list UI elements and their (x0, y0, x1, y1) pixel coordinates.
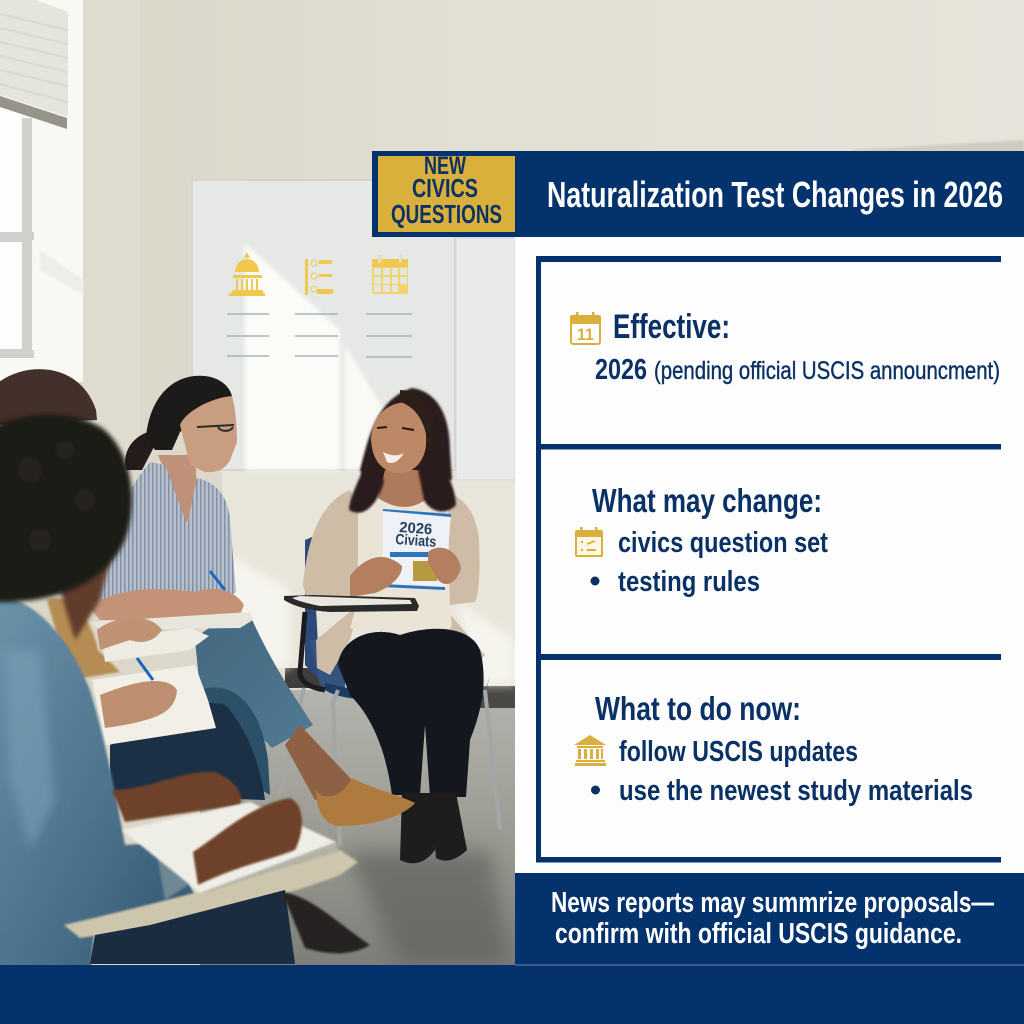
neck (378, 470, 428, 507)
student in striped shirt (85, 376, 415, 826)
cuff (155, 840, 196, 900)
window glass and frame (0, 118, 34, 358)
lower wall (222, 465, 515, 686)
effective date: 2026 (595, 354, 647, 386)
face (180, 396, 237, 472)
inner top (350, 498, 452, 636)
header bar (372, 151, 1024, 237)
lower legs (90, 890, 295, 964)
dark shoe (282, 892, 370, 953)
board text lines (227, 314, 412, 357)
board icon: checklist (305, 259, 333, 295)
heading: Effective: (613, 308, 730, 346)
footer note (515, 873, 1024, 965)
bullet text: follow USCIS updates (619, 736, 858, 768)
hair sides (349, 430, 456, 513)
hand (97, 618, 162, 650)
far forearm (112, 772, 241, 822)
hair (0, 369, 97, 425)
gold badge (378, 152, 515, 232)
board icon: calendar (372, 255, 408, 294)
floor (200, 668, 515, 965)
window (0, 0, 83, 382)
jeans (195, 615, 313, 748)
bullet (591, 786, 600, 794)
writing notebook (92, 665, 216, 745)
booklet (382, 509, 451, 590)
gold badge: CIVICS (412, 173, 478, 203)
pen (137, 658, 153, 680)
shirt (85, 462, 236, 605)
notebook (90, 612, 253, 630)
section: what to do now (574, 690, 973, 807)
content frame (536, 256, 1001, 862)
arm and hand (90, 589, 244, 620)
bottom band (0, 965, 1024, 1024)
window reveal (0, 0, 83, 382)
head hair (146, 376, 232, 450)
board icon: capitol dome (229, 252, 265, 296)
hair front (400, 390, 437, 452)
window blind (0, 0, 68, 117)
writing hand (100, 681, 177, 728)
window column (83, 0, 140, 470)
icon: calendar 11: 11 (577, 325, 594, 344)
small notebook (102, 628, 209, 662)
booklet: Civiats (395, 531, 437, 551)
bullet (590, 576, 600, 586)
hands (350, 548, 461, 597)
bullet text: testing rules (618, 566, 760, 598)
icon: government building (574, 735, 606, 766)
boots (400, 793, 467, 863)
hair back (360, 388, 452, 480)
middle student arms and notebooks (47, 598, 265, 800)
icon: calendar 11 (570, 312, 601, 344)
section: effective (570, 308, 1000, 386)
trousers (338, 629, 484, 797)
gold badge: NEW (424, 152, 466, 180)
neck (158, 455, 197, 525)
floor shadow (345, 850, 510, 965)
teacher with chair (279, 388, 500, 863)
blonde hair (47, 598, 120, 680)
cardigan (303, 490, 485, 675)
bullet text: civics question set (618, 527, 828, 559)
heading: What may change: (592, 482, 822, 519)
chair (279, 537, 500, 845)
booklet: 2026 (399, 519, 433, 538)
curly hair (0, 414, 132, 602)
section: what may change (575, 482, 828, 598)
white content panel (515, 237, 1024, 873)
dark trousers (110, 703, 265, 800)
neck (60, 560, 110, 640)
face (371, 402, 426, 473)
heading: What to do now: (595, 690, 801, 727)
back student (0, 369, 97, 425)
denim shirt (0, 595, 195, 975)
desk arm (284, 595, 419, 612)
front student (0, 414, 370, 975)
glasses (197, 425, 234, 431)
whiteboard (192, 180, 515, 480)
ankle (285, 725, 352, 800)
ponytail (125, 432, 155, 470)
desk (64, 802, 358, 938)
shirt highlight (5, 650, 55, 850)
gold badge: QUESTIONS (391, 199, 502, 229)
near forearm (193, 798, 302, 885)
icon: checklist calendar (575, 527, 603, 557)
ceiling corner (850, 140, 1024, 152)
loafer (316, 778, 415, 826)
